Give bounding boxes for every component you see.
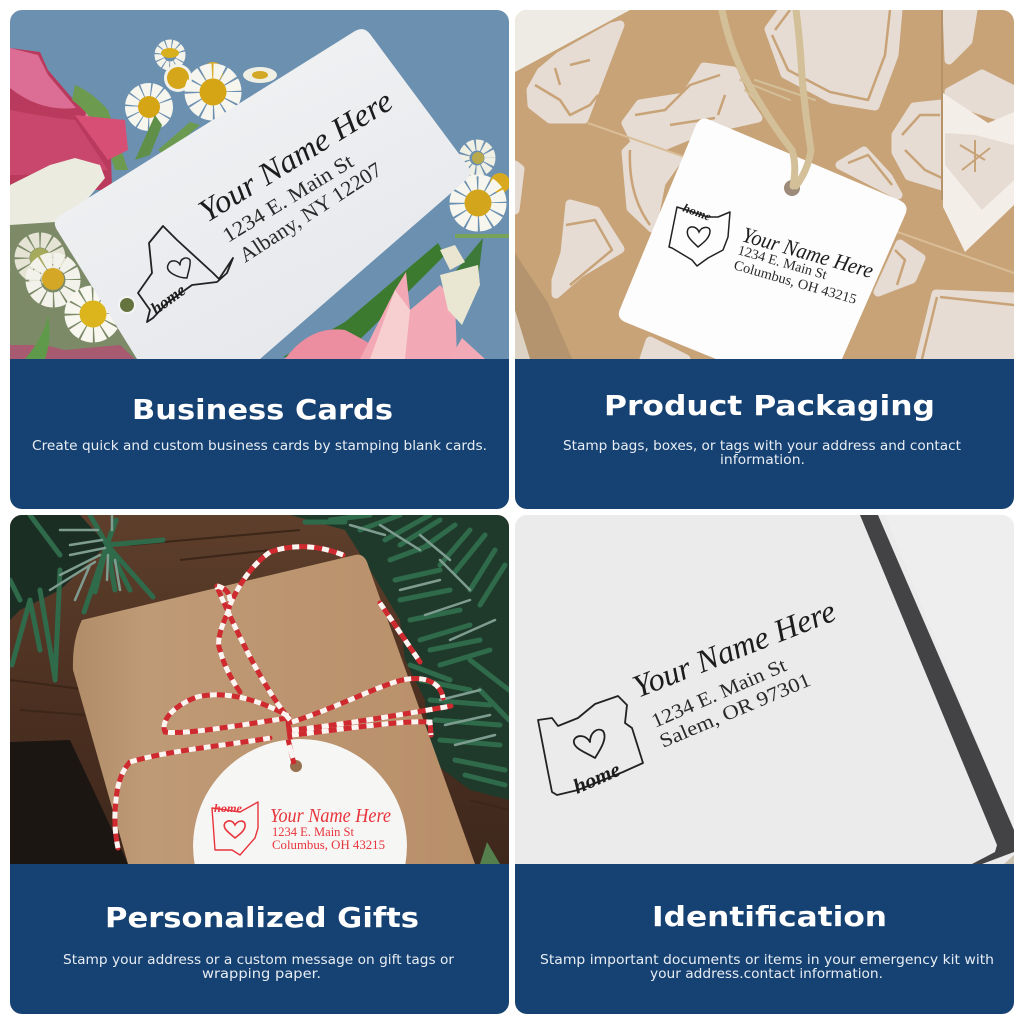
stamp: home word: home	[569, 757, 624, 799]
panel: personalized gifts	[10, 515, 509, 1014]
description	[540, 953, 994, 982]
stamp: New York outline	[138, 226, 233, 322]
photo: stamped notebook page	[515, 515, 1014, 864]
stamp: heart	[574, 730, 605, 758]
stamp: Ohio outline	[212, 802, 258, 855]
panel: product packaging	[515, 10, 1014, 509]
round gift tag	[193, 739, 407, 864]
description: your address.contact information.	[650, 967, 883, 982]
stamp: heart	[687, 227, 710, 247]
description: Stamp bags, boxes, or tags with your address and contact	[563, 439, 961, 454]
stamp: Ohio outline	[669, 207, 730, 266]
daisies	[22, 44, 510, 359]
heading: Business Cards	[132, 393, 393, 426]
stamp: heart	[224, 821, 245, 838]
tag hole	[290, 760, 302, 772]
stamp: name: Your Name Here	[740, 222, 876, 283]
stamp: Oregon outline	[538, 696, 643, 795]
panel: business cards	[10, 10, 510, 509]
stamp: heart	[168, 258, 190, 278]
photo: wrapped gift with tag	[10, 515, 509, 864]
photo: card among flowers	[10, 10, 510, 359]
white paper heart	[943, 93, 1014, 252]
stamp: address line 1: 1234 E. Main St	[218, 149, 358, 247]
heading: Product Packaging	[604, 389, 935, 422]
heart inner outlines	[535, 10, 1014, 359]
white square tag	[619, 10, 907, 359]
fir branches	[10, 515, 509, 864]
caption box	[10, 359, 509, 509]
wrapping paper hearts	[515, 10, 1014, 359]
tag hole	[784, 180, 800, 196]
heading: Personalized Gifts	[105, 901, 419, 934]
foliage and pink lily	[283, 234, 509, 359]
white card	[55, 29, 470, 359]
photo: kraft box with tag	[515, 10, 1014, 359]
stamp: address line 2: Columbus, OH 43215	[272, 838, 385, 852]
panel: identification	[515, 515, 1014, 1014]
description: Create quick and custom business cards by stamping blank cards.	[32, 439, 487, 454]
kraft gift box	[73, 555, 475, 864]
stamp: home word: home	[681, 201, 714, 224]
punched hole	[118, 296, 136, 314]
stamp: address line 2: Salem, OR 97301	[656, 669, 814, 753]
box seam	[588, 123, 1014, 273]
stamp: home word: home	[214, 801, 243, 815]
red and white twine	[115, 547, 451, 848]
caption box	[515, 864, 1014, 1014]
stamp: name: Your Name Here	[627, 592, 841, 705]
description: Stamp important documents or items in your emergency kit with	[540, 953, 994, 968]
meadow foliage	[10, 222, 137, 359]
page shading	[885, 515, 1014, 830]
stamp: name: Your Name Here	[192, 82, 399, 229]
caption box	[515, 359, 1014, 509]
twine	[722, 10, 815, 186]
description: Stamp your address or a custom message on gift tags or	[63, 953, 455, 968]
stamp: address line 2: Columbus, OH 43215	[732, 258, 858, 308]
caption box	[10, 864, 509, 1014]
description: wrapping paper.	[202, 967, 321, 982]
stamp: name: Your Name Here	[270, 805, 391, 827]
notebook band	[860, 515, 1014, 864]
stamp: address line 1: 1234 E. Main St	[648, 654, 790, 733]
description	[563, 439, 961, 468]
description	[63, 953, 455, 982]
stamp: address line 1: 1234 E. Main St	[736, 243, 829, 283]
stamp: address line 1: 1234 E. Main St	[272, 825, 355, 839]
stamp: address line 2: Albany, NY 12207	[235, 157, 386, 267]
heading: Identification	[652, 900, 887, 933]
stamp: home word: home	[147, 280, 189, 318]
pink flowers left	[10, 48, 137, 359]
white flower	[10, 158, 105, 230]
description: information.	[720, 453, 805, 468]
